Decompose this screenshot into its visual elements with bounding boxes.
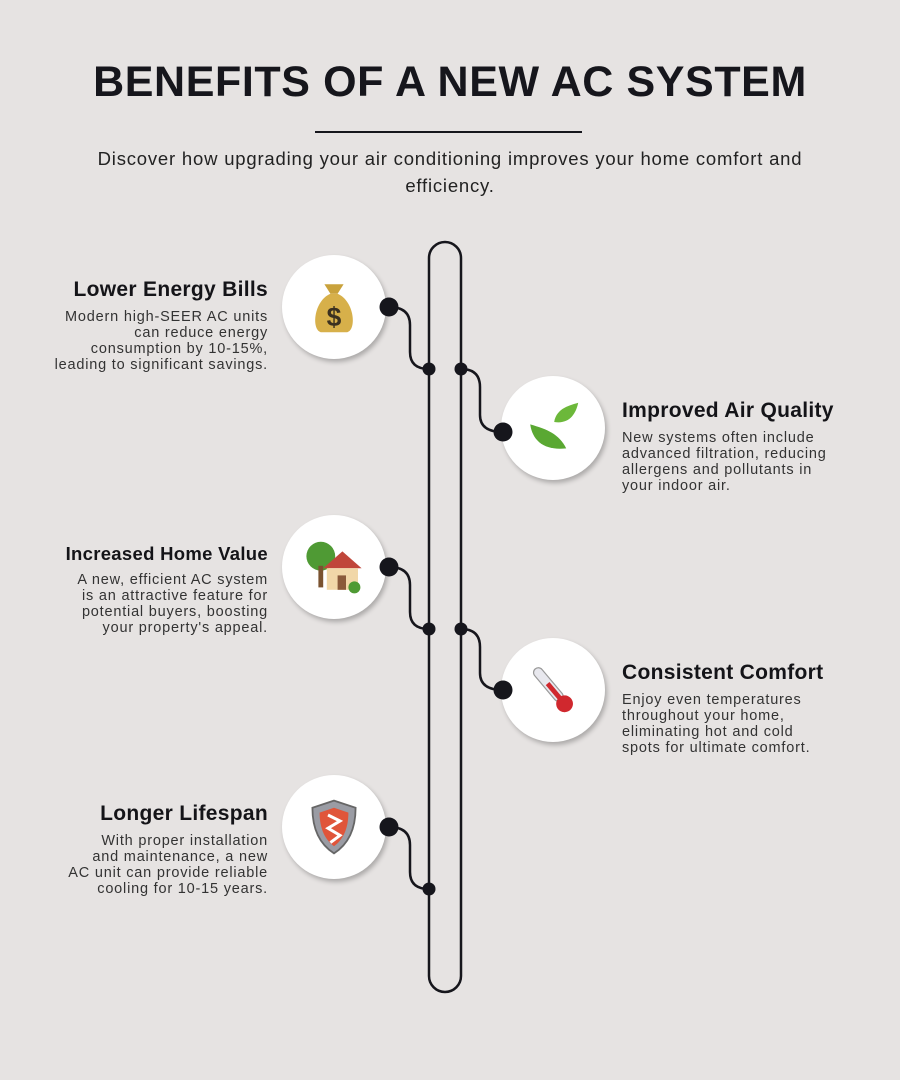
- text: improved air quality: advanced filtration, reducing: [622, 446, 827, 462]
- subtitle: Discover how upgrading your air conditioning improves your home comfort and: [98, 148, 802, 169]
- text: longer lifespan: and maintenance, a new: [92, 849, 268, 865]
- text: lower energy bills: Modern high-SEER AC units: [65, 309, 268, 325]
- text: increased home value: [66, 543, 268, 636]
- icon: thermometer: [501, 638, 605, 742]
- text: improved air quality: your indoor air.: [622, 478, 731, 494]
- icon: money bag: $: [327, 302, 342, 332]
- text: consistent comfort: throughout your home,: [622, 708, 785, 724]
- text: increased home value: is an attractive feature for: [82, 588, 268, 604]
- text: increased home value: potential buyers, boosting: [82, 604, 268, 620]
- text: consistent comfort: eliminating hot and cold: [622, 724, 794, 740]
- text: increased home value: A new, efficient AC system: [77, 572, 268, 588]
- text: improved air quality: New systems often include: [622, 430, 814, 446]
- text: improved air quality: allergens and pollutants in: [622, 462, 812, 478]
- text: increased home value: your property's appeal.: [103, 620, 268, 636]
- text: longer lifespan: cooling for 10-15 years.: [97, 881, 268, 897]
- text: improved air quality: [622, 399, 834, 494]
- icon: leaves: [501, 376, 605, 480]
- text: longer lifespan: Longer Lifespan: [100, 802, 268, 825]
- text: lower energy bills: can reduce energy: [134, 325, 268, 341]
- text: consistent comfort: [622, 661, 823, 756]
- text: increased home value: Increased Home Value: [66, 543, 268, 564]
- subtitle: [98, 148, 802, 196]
- text: improved air quality: Improved Air Quality: [622, 399, 834, 422]
- text: longer lifespan: With proper installation: [101, 833, 268, 849]
- icon: house with tree: [282, 515, 386, 619]
- subtitle: efficiency.: [405, 175, 495, 196]
- icon: shield: [282, 775, 386, 879]
- text: lower energy bills: consumption by 10-15%,: [91, 341, 268, 357]
- text: longer lifespan: [68, 802, 268, 897]
- text: lower energy bills: leading to significant savings.: [55, 357, 268, 373]
- text: consistent comfort: Consistent Comfort: [622, 661, 823, 684]
- icon: money bag: [282, 255, 386, 359]
- title: BENEFITS OF A NEW AC SYSTEM: [93, 58, 807, 106]
- text: consistent comfort: spots for ultimate comfort.: [622, 740, 810, 756]
- title underline: [315, 131, 582, 133]
- text: longer lifespan: AC unit can provide reliable: [68, 865, 268, 881]
- text: lower energy bills: Lower Energy Bills: [74, 278, 268, 301]
- text: lower energy bills: [55, 278, 268, 373]
- text: consistent comfort: Enjoy even temperatures: [622, 692, 802, 708]
